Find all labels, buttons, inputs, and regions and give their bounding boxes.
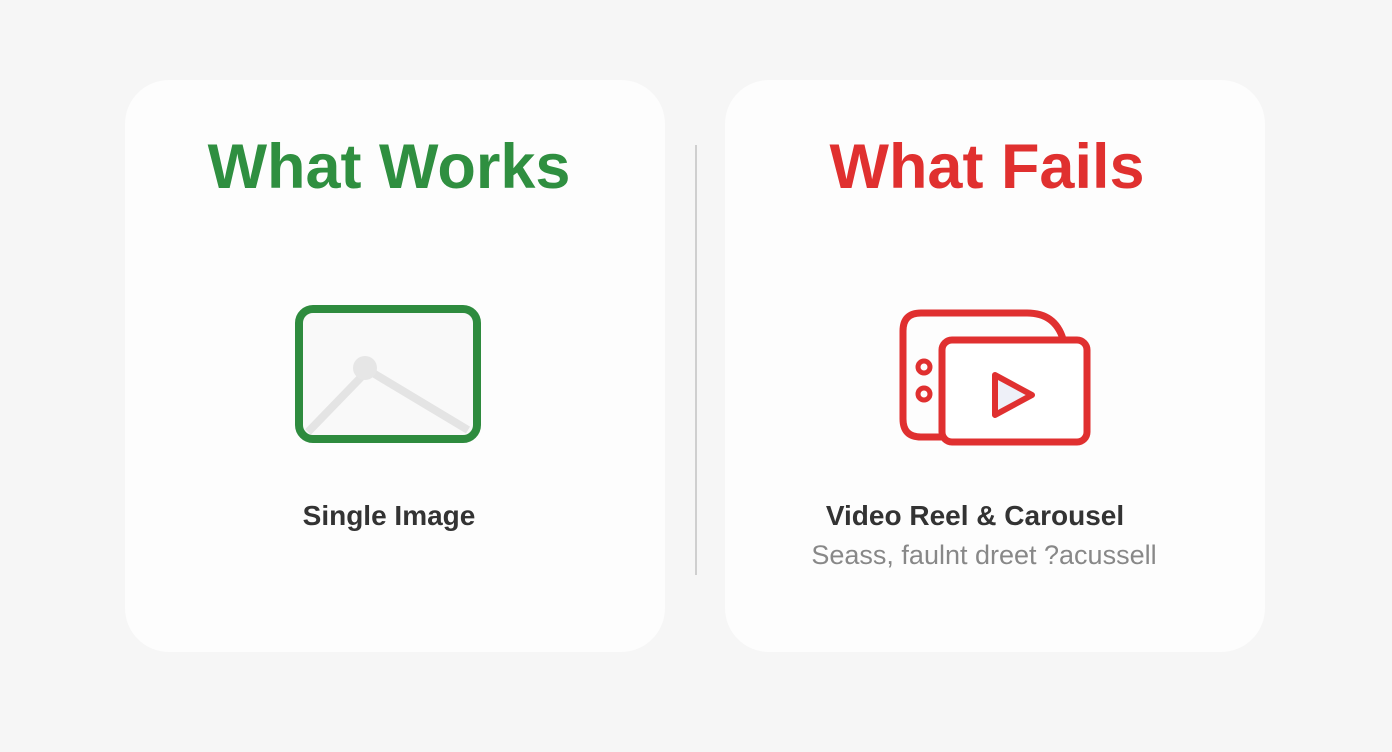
icon: video reel & carousel xyxy=(900,310,1090,446)
icon: single image xyxy=(295,305,481,443)
subtext: Seass, faulnt dreet ?acussell xyxy=(811,540,1157,570)
heading: what fails: What Fails xyxy=(829,132,1145,202)
panel: what works xyxy=(125,80,665,652)
label: video reel & carousel: Video Reel & Carousel xyxy=(826,500,1124,531)
divider xyxy=(695,145,697,575)
panel: what fails xyxy=(725,80,1265,652)
heading: what works: What Works xyxy=(208,132,570,202)
label: single image: Single Image xyxy=(303,500,475,531)
